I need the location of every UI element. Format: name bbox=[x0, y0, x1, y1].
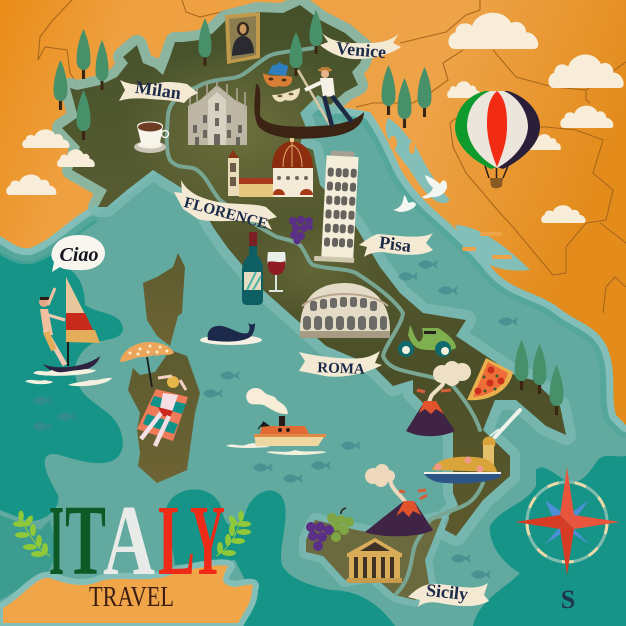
laurel right bbox=[216, 510, 251, 556]
fish bbox=[33, 260, 518, 579]
speech bubble Ciao bbox=[51, 235, 105, 272]
subtitle: TRAVEL: TRAVEL bbox=[89, 582, 174, 613]
text: Y bbox=[190, 484, 225, 596]
deep sea bays, south bbox=[0, 456, 626, 626]
Colosseum bbox=[300, 283, 390, 338]
Etna volcano bbox=[365, 464, 433, 536]
banner: Venice: Venice bbox=[335, 38, 387, 62]
rivers bbox=[167, 48, 483, 594]
doves bbox=[393, 175, 447, 212]
compass rose bbox=[515, 467, 620, 575]
banner: Milan: Milan bbox=[134, 77, 182, 103]
clouds bbox=[6, 13, 624, 223]
grapes, green and purple bbox=[306, 508, 354, 551]
parasol bbox=[120, 342, 174, 387]
Greek temple bbox=[347, 538, 402, 583]
whale bbox=[200, 323, 262, 345]
gondola with gondolier bbox=[254, 67, 364, 139]
carnival masks bbox=[263, 62, 300, 102]
banner: Venice bbox=[320, 33, 401, 62]
wine bottle bbox=[242, 232, 263, 305]
wine glass bbox=[267, 252, 286, 291]
Vesuvius volcano bbox=[406, 361, 471, 436]
Vespa scooter bbox=[398, 325, 456, 357]
banner: Pisa: Pisa bbox=[378, 232, 412, 256]
land to the north with coastal bands bbox=[0, 0, 626, 425]
title: ITALY: I bbox=[49, 484, 64, 596]
windsurfer bbox=[39, 277, 100, 373]
banner: Sicily: Sicily bbox=[425, 580, 469, 604]
sunbather on beach towel bbox=[137, 376, 188, 446]
coffee cup bbox=[134, 122, 168, 153]
laurel left bbox=[13, 510, 50, 557]
land to the south: Tunisia bbox=[0, 562, 256, 626]
Sardinia island bbox=[128, 350, 200, 483]
speech bubble Ciao: Ciao bbox=[60, 244, 98, 266]
Mona Lisa painting bbox=[225, 12, 260, 64]
pasta plate with fork bbox=[424, 410, 520, 483]
banner: Florence bbox=[174, 180, 277, 233]
banner: Florence: FLORENCE bbox=[182, 194, 270, 233]
title: ITALY: L bbox=[158, 484, 195, 596]
banner: Pisa bbox=[359, 232, 433, 257]
Milan cathedral bbox=[188, 82, 247, 145]
compass south marker: S bbox=[561, 585, 575, 614]
Sicily island bbox=[306, 518, 442, 600]
banner: Roma bbox=[299, 351, 382, 378]
Leaning Tower of Pisa bbox=[314, 150, 360, 263]
title: ITALY bbox=[49, 484, 225, 596]
steamboat bbox=[246, 388, 326, 446]
cypress trees bbox=[54, 10, 563, 415]
purple grapes bbox=[289, 216, 313, 244]
hot air balloon bbox=[455, 91, 540, 188]
title: ITALY: T bbox=[65, 484, 106, 596]
pizza slice bbox=[467, 358, 513, 400]
title: ITALY: A bbox=[103, 484, 155, 596]
banner: Roma: ROMA bbox=[317, 360, 365, 378]
waves bbox=[25, 369, 327, 455]
Italy mainland bbox=[62, 5, 566, 536]
national borders bbox=[38, 0, 626, 313]
banner: Sicily bbox=[408, 580, 489, 607]
Corsica island bbox=[143, 253, 185, 346]
Florence cathedral dome bbox=[228, 138, 313, 197]
Adriatic lagoons and islands bbox=[386, 118, 530, 271]
banner: Milan bbox=[119, 77, 198, 103]
darker coastal band, Ligurian shore bbox=[0, 208, 90, 248]
